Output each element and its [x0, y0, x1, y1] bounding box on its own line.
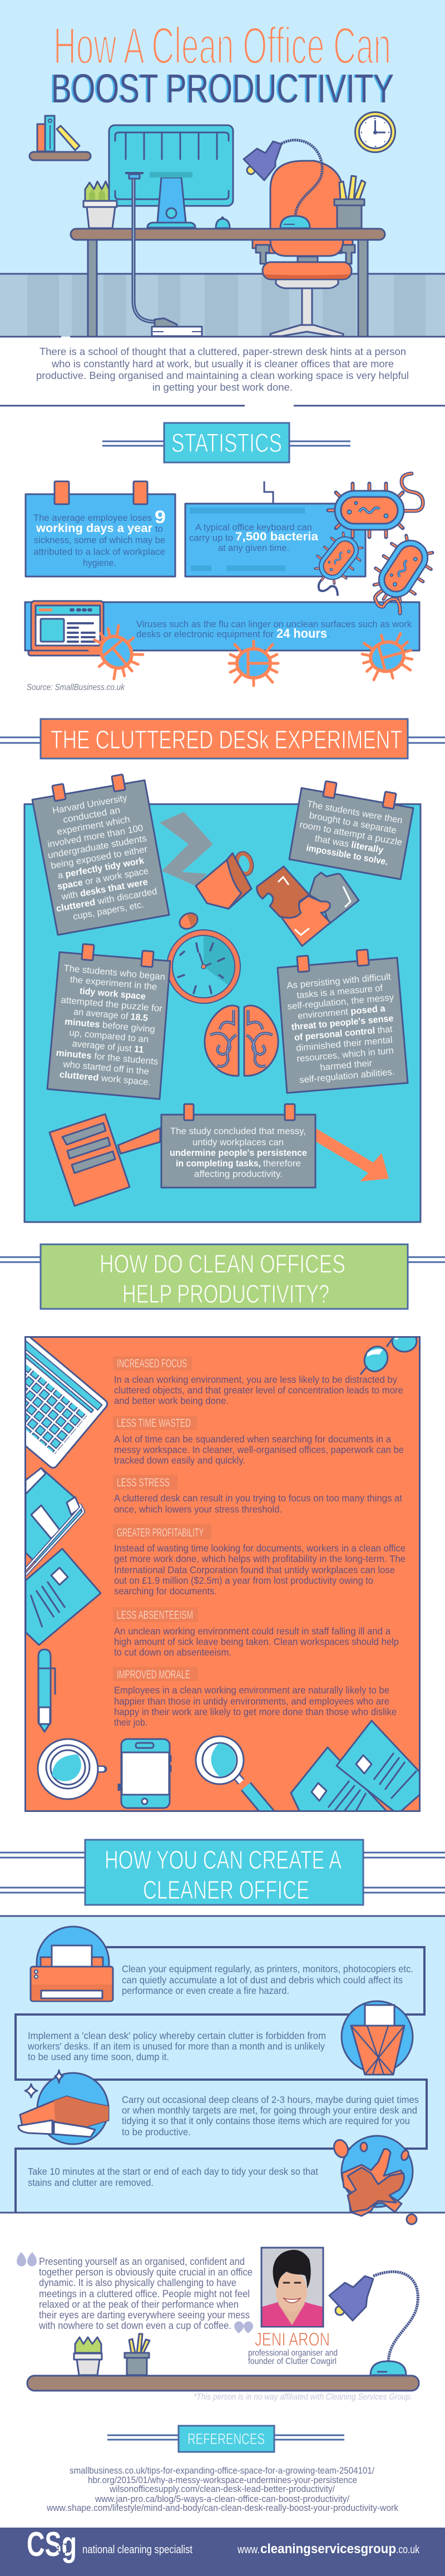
note: tidy work space results — [47, 944, 170, 1099]
calendar text: attributed to a lack of workplace — [33, 546, 165, 557]
calendar text: sickness, some of which may be — [34, 535, 165, 545]
note text: environment posed a — [297, 1003, 386, 1021]
note text: tasks is a measure of — [296, 983, 383, 1001]
note text: average of just 11 — [72, 1038, 144, 1055]
note text: space or a work space — [57, 866, 149, 892]
icon: notebook — [26, 1468, 83, 1575]
calendar tabs — [55, 481, 147, 504]
keyboard text: at any given time. — [218, 543, 289, 553]
intro text — [36, 346, 409, 393]
section: greater profitability: Instead of wasting time looking for documents, workers in a clean office — [114, 1543, 406, 1554]
intro text: There is a school of thought that a cluttered, paper-strewn desk hints at a person — [39, 346, 406, 357]
heading: statistics — [102, 423, 350, 462]
logo: CSg — [27, 2525, 77, 2564]
quote text: relaxed or at the peak of their performance when — [39, 2299, 239, 2310]
references list: hbr.org/2015/01/why-a-messy-workspace-undermines-your-persistence — [88, 2475, 357, 2485]
tip 2 text: to be used any time soon, dump it. — [28, 2051, 169, 2062]
icon: clock — [167, 930, 240, 1003]
heading: how you can create a cleaner office: CLEANER OFFICE — [143, 1875, 309, 1904]
icon: virus bug three — [358, 629, 417, 684]
references list — [46, 2466, 399, 2513]
calendar text: working days a year — [36, 522, 152, 535]
note text: who started off in the — [62, 1059, 150, 1077]
section: less stress: A cluttered desk can result in you trying to focus on too many things at — [114, 1493, 402, 1504]
section: greater profitability — [113, 1524, 406, 1597]
desk shelf — [27, 2376, 419, 2391]
intro text: who is constantly hard at work, but usually it is cleaner offices that are more — [51, 358, 394, 370]
note: conclusion — [161, 1104, 315, 1188]
note text — [170, 1126, 307, 1179]
references list: smallbusiness.co.uk/tips-for-expanding-office-space-for-a-growing-team-2504101/ — [70, 2466, 374, 2476]
panel: experiment — [24, 774, 421, 1222]
references list: www.jan-pro.ca/blog/5-ways-a-clean-office-can-boost-productivity/ — [95, 2494, 349, 2504]
icon: monitor — [109, 125, 233, 228]
section: less time wasted: tracked down easily and quickly. — [114, 1455, 245, 1466]
icon: document sheet — [26, 1549, 101, 1645]
section: less stress: LESS STRESS — [117, 1476, 170, 1489]
section: less absenteeism: LESS ABSENTEEISM — [117, 1609, 193, 1622]
virus text: Viruses such as the flu can linger on unclean surfaces such as work — [136, 619, 412, 629]
icon: desk lamp large — [329, 2272, 418, 2375]
references list: www.shape.com/lifestyle/mind-and-body/can-clean-desk-really-boost-your-productivity-work — [46, 2503, 399, 2513]
tip 3 text: Carry out occasional deep cleans of 2-3 hours, maybe during quiet times — [122, 2094, 419, 2105]
section: improved morale: IMPROVED MORALE — [117, 1668, 190, 1681]
note text: conducted an — [62, 805, 121, 825]
note text: harmed their — [320, 1058, 373, 1073]
note text: of personal control that — [294, 1024, 393, 1043]
icon: paint drop — [407, 2214, 417, 2224]
tip 4 text — [28, 2166, 318, 2188]
note text: The students were then — [306, 799, 403, 826]
note text: that was literally — [314, 834, 384, 855]
note text: up, compared to an — [69, 1028, 149, 1045]
footer — [0, 2525, 445, 2576]
note text — [54, 963, 166, 1088]
section: improved morale: happier than those in untidy environments, and employees who are — [114, 1696, 389, 1707]
panel: virus statistic — [25, 601, 419, 656]
icon: desk bell — [216, 216, 230, 228]
virus text: desks or electronic equipment for — [136, 629, 274, 639]
keyboard text: A typical office keyboard can — [195, 522, 312, 533]
tip 1 text: Clean your equipment regularly, as printers, monitors, photocopiers etc. — [122, 1963, 413, 1974]
calendar text: to — [155, 524, 163, 534]
intro text: in getting your best work done. — [152, 382, 293, 393]
icon: laptop — [28, 601, 103, 656]
calendar text — [33, 507, 166, 568]
section: greater profitability: GREATER PROFITABILITY — [117, 1526, 204, 1539]
icon: keyboard — [26, 1338, 108, 1469]
intro text: productive. Being organised and maintaining a clean working space is very helpful — [36, 370, 409, 381]
tip 3 text — [122, 2094, 419, 2137]
note text: tidy work space — [79, 986, 146, 1002]
note text: self-regulation, the messy — [287, 992, 394, 1012]
icon: cleaning hand with sparkles — [18, 2070, 108, 2144]
note text: cluttered work space. — [59, 1070, 151, 1087]
section: greater profitability: get more work done, which helps with profitability in the long-term. The — [114, 1553, 406, 1564]
heading: references — [107, 2426, 344, 2452]
tip 2 text: Implement a 'clean desk' policy whereby certain clutter is forbidden from — [28, 2030, 326, 2041]
photo: jeni aron — [261, 2248, 323, 2327]
note text: resources, which in turn — [296, 1046, 394, 1064]
section: improved morale — [113, 1667, 397, 1728]
note: puzzle — [289, 781, 413, 879]
tip 3 text: to be productive. — [122, 2126, 191, 2137]
section: less time wasted: LESS TIME WASTED — [117, 1417, 191, 1430]
note text — [285, 972, 401, 1086]
note text: involved more than 100 — [47, 823, 144, 850]
logo: national cleaning specialist — [82, 2544, 192, 2556]
section: less absenteeism: An unclean working environment could result in staff falling ill and a — [114, 1626, 390, 1637]
icon: phone — [119, 1739, 170, 1808]
icon: document — [50, 1114, 130, 1206]
name and title: founder of Clutter Cowgirl — [248, 2357, 337, 2366]
icon: paper stack — [290, 1720, 419, 1810]
section: increased focus: and better work being done. — [114, 1395, 229, 1406]
icon: orange arrow — [118, 1128, 389, 1181]
tip 1 text: performance or even create a fire hazard. — [122, 1985, 289, 1996]
note text: minutes before giving — [64, 1017, 155, 1035]
note tabs — [52, 774, 125, 801]
note tabs — [323, 781, 396, 809]
icon: bacterium two — [307, 529, 368, 595]
heading: the cluttered desk experiment — [0, 719, 445, 758]
tip 2 text — [27, 2030, 326, 2062]
name and title: professional organiser and — [248, 2348, 338, 2358]
references list: wilsonofficesupply.com/clean-desk-lead-better-productivity/ — [109, 2484, 335, 2494]
note text: undermine people's persistence — [170, 1147, 307, 1158]
note tabs — [297, 949, 369, 972]
closing quote mark — [234, 2322, 253, 2333]
heading: references: REFERENCES — [187, 2430, 265, 2447]
section: less stress: once, which lowers your stress threshold. — [114, 1504, 282, 1515]
quote: jeni aron — [17, 2252, 253, 2333]
note text: attempted the puzzle for — [61, 995, 163, 1014]
logo — [27, 2525, 192, 2564]
section: less absenteeism: to cut down on absenteeism. — [114, 1647, 231, 1658]
heading: how you can create a cleaner office: HOW YOU CAN CREATE A — [105, 1845, 342, 1874]
note text: in completing tasks, — [176, 1158, 261, 1169]
section: less time wasted: A lot of time can be squandered when searching for documents in a — [114, 1434, 391, 1445]
icon: jigsaw puzzle — [257, 866, 359, 946]
keyboard text — [189, 522, 318, 553]
note text: self-regulation abilities. — [299, 1067, 395, 1085]
note text: diminished their mental — [295, 1035, 393, 1053]
note tabs — [184, 1104, 295, 1120]
calendar text: 9 — [155, 507, 166, 527]
note text: an average of 18.5 — [73, 1007, 149, 1023]
section: greater profitability: searching for documents. — [114, 1585, 217, 1597]
icon: saucer and cup — [38, 1739, 103, 1799]
section: less stress — [113, 1475, 402, 1515]
heading: how you can create a cleaner office — [0, 1840, 445, 1905]
note text: with desks that were — [60, 877, 149, 902]
note text: The students who began — [63, 963, 166, 982]
icon: virus bug one — [83, 619, 149, 685]
icon: wall clock — [355, 112, 395, 152]
section: less absenteeism — [113, 1607, 399, 1658]
icon: zigzag arrow — [160, 812, 213, 886]
note text: cups, papers, etc. — [72, 900, 145, 922]
tip 4 text: stains and clutter are removed. — [28, 2177, 154, 2188]
heading: how do clean offices help productivity — [0, 1244, 445, 1309]
source note: Source: SmallBusiness.co.uk — [27, 683, 125, 692]
name and title — [248, 2329, 338, 2366]
quote text: Presenting yourself as an organised, confident and — [39, 2256, 245, 2267]
section: increased focus: In a clean working environment, you are less likely to be distracted by — [114, 1374, 397, 1385]
heading: statistics: STATISTICS — [171, 428, 282, 457]
quote text: meetings in a cluttered office. People might not feel — [39, 2288, 250, 2299]
note text: affecting productivity. — [194, 1169, 283, 1179]
icon: brain — [205, 1006, 278, 1076]
section: increased focus: INCREASED FOCUS — [117, 1357, 187, 1370]
icon: glasses — [359, 1338, 417, 1375]
icon: plant — [83, 181, 117, 228]
panel: hero illustration — [0, 0, 445, 337]
name and title: JENI ARON — [255, 2329, 330, 2350]
note text: the experiment in the — [70, 974, 157, 992]
path lines connecting tips — [16, 1947, 427, 2213]
quote text — [38, 2256, 253, 2331]
quote text: together person is obviously quite crucial in an office — [39, 2267, 253, 2278]
note text: cluttered with discarded — [55, 886, 158, 914]
icon: virus bug two — [229, 641, 278, 686]
note text: room to attempt a puzzle — [299, 820, 403, 848]
title — [50, 17, 394, 111]
opening quote mark — [17, 2252, 37, 2266]
section: greater profitability: out on £1.9 million ($2.5m) a year from lost productivity owing to — [114, 1575, 373, 1586]
panel: keyboard statistic — [185, 481, 365, 577]
icon: plant on desk — [74, 2337, 102, 2375]
icon: printer — [31, 1927, 113, 2001]
icon: desk — [71, 229, 385, 337]
note tabs — [82, 944, 154, 967]
icon: bacterium three — [364, 530, 439, 613]
note text: experiment which — [56, 814, 131, 837]
note text: untidy workplaces can — [192, 1137, 284, 1147]
icon: bacterium one — [328, 474, 423, 537]
note text — [38, 791, 160, 924]
note text: undergraduate students — [47, 833, 147, 860]
tip 3 text: tidying it so that it only contains those items which are required for you — [122, 2115, 410, 2126]
quote text: with nowhere to set down even a cup of coffee. — [38, 2320, 231, 2331]
note: self-regulation — [278, 949, 408, 1093]
website: www. — [237, 2544, 260, 2556]
tip 2 text: workers' desks. If an item is unused for more than a month and is unlikely — [27, 2041, 325, 2052]
section: greater profitability: International Data Corporation found that untidy workplaces can lose — [114, 1564, 395, 1575]
virus text — [136, 619, 412, 641]
tip 4 text: Take 10 minutes at the start or end of each day to tidy your desk so that — [28, 2166, 318, 2177]
note text: minutes for the students — [56, 1048, 159, 1067]
panel: calendar statistic — [26, 481, 175, 577]
wainscot wall — [0, 274, 445, 337]
keyboard text: 7,500 bacteria — [235, 530, 318, 543]
section: improved morale: Employees in a clean working environment are naturally likely to be — [114, 1685, 389, 1696]
website: .co.uk — [396, 2544, 420, 2556]
disclaimer: *This person is in no way affiliated with Cleaning Services Group. — [194, 2392, 412, 2402]
note text: threat to people's sense — [291, 1013, 394, 1032]
panel illustrations — [0, 1311, 423, 1836]
section: improved morale: happy in their work are likely to get more done than those who dislike — [114, 1706, 397, 1717]
section: less time wasted: messy workspace. In cleaner, well-organised offices, paperwork can be — [114, 1444, 404, 1455]
icon: cable and floor box — [134, 179, 202, 336]
icon: pen — [38, 1649, 55, 1732]
calendar text: The average employee loses — [33, 513, 152, 523]
icon: pen pot on desk — [125, 2334, 150, 2375]
heading: how do clean offices help productivity: HELP PRODUCTIVITY? — [122, 1279, 329, 1308]
keyboard text: carry up to — [189, 533, 233, 543]
tip 1 text — [122, 1963, 413, 1996]
icon: waste bin — [342, 2001, 413, 2075]
website: cleaningservicesgroup — [260, 2541, 396, 2557]
icon: stained circle with splats — [332, 2136, 413, 2216]
note text: As persisting with difficult — [286, 972, 392, 991]
calendar text: hygiene. — [83, 558, 116, 568]
quote text: dynamic. It is also physically challenging to have — [39, 2277, 236, 2288]
section: increased focus — [113, 1356, 403, 1406]
icon: pen pot — [334, 176, 365, 228]
note text: impossible to solve. — [305, 843, 389, 867]
tip 3 text: or when monthly targets are met, for going through your entire desk and — [122, 2105, 417, 2116]
note text: therefore — [263, 1158, 301, 1169]
note text: brought to a separate — [308, 810, 397, 836]
note text: The study concluded that messy, — [170, 1126, 306, 1136]
virus text: 24 hours — [276, 626, 327, 641]
icon: shelf with books — [29, 116, 91, 160]
icon: magnifying glass — [195, 1735, 275, 1810]
section: less absenteeism: high amount of sick leave being taken. Clean workspaces should help — [114, 1636, 399, 1647]
panel: cleaner office tips — [0, 1916, 445, 2213]
icon: spilled cup — [177, 850, 256, 932]
heading: how do clean offices help productivity: HOW DO CLEAN OFFICES — [100, 1249, 345, 1278]
section: less time wasted — [113, 1416, 404, 1466]
quote text: their eyes are darting everywhere seeing your mess — [39, 2309, 250, 2321]
tip 1 text: can quietly accumulate a lot of dust and debris which could affect its — [122, 1974, 403, 1986]
section: increased focus: cluttered objects, and that greater level of concentration leads to more — [114, 1385, 403, 1396]
note: harvard experiment — [32, 774, 169, 935]
icon: desk lamp — [244, 140, 322, 228]
note text — [295, 799, 407, 869]
virus text: . — [328, 629, 330, 639]
note text: a perfectly tidy work — [57, 856, 145, 881]
section: improved morale: their job. — [114, 1717, 147, 1728]
panel: how clean offices help — [24, 1336, 421, 1812]
icon: chair — [253, 161, 355, 336]
note text: Harvard University — [52, 793, 128, 816]
note text: being exposed to either — [50, 844, 149, 871]
